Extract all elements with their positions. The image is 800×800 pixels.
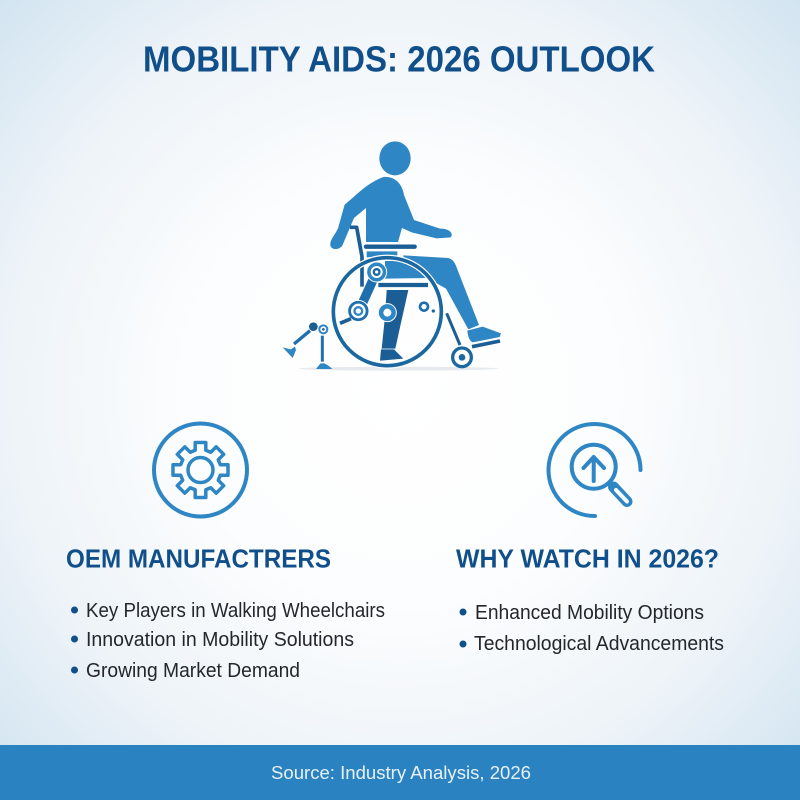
robotic leg <box>283 322 332 369</box>
icon: gear <box>154 424 247 516</box>
wheelchair big wheel <box>333 258 441 366</box>
seat bar <box>378 278 428 291</box>
footer band: Source: Industry Analysis, 2026 <box>271 762 531 783</box>
title: MOBILITY AIDS: 2026 OUTLOOK <box>143 38 655 80</box>
robotic arm link <box>359 273 376 310</box>
dark lower leg <box>382 290 408 349</box>
list: why watch: Technological Advancements <box>474 633 724 655</box>
caster fork <box>447 313 460 345</box>
robotic lower joint <box>348 300 369 322</box>
illustration: person in wheelchair <box>283 141 501 371</box>
robotic upper joint <box>367 262 387 282</box>
icon: magnifier with up arrow <box>548 424 640 516</box>
list: why watch <box>460 602 724 655</box>
list: OEM manufacturers: Key Players in Walking Wheelchairs <box>86 600 385 622</box>
footer band <box>0 745 800 800</box>
footrest <box>472 341 500 347</box>
person head <box>379 141 411 175</box>
list: OEM manufacturers <box>71 600 385 682</box>
person thigh and lower leg <box>385 255 479 329</box>
person torso and arms <box>330 177 452 249</box>
caster wheel <box>453 348 471 367</box>
armrest <box>366 240 415 253</box>
heading: OEM manufacturers: OEM MANUFACTRERS <box>66 544 331 574</box>
list: OEM manufacturers: Innovation in Mobility Solutions <box>86 629 354 651</box>
small joint <box>420 303 435 313</box>
person foot <box>467 327 501 342</box>
link stub <box>340 319 351 323</box>
chair back frame <box>350 227 362 287</box>
heading: why watch: WHY WATCH IN 2026? <box>456 544 719 574</box>
seat cushion <box>367 251 397 257</box>
middle joint <box>378 304 396 322</box>
shoe <box>380 349 403 361</box>
list: OEM manufacturers: Growing Market Demand <box>86 660 300 682</box>
list: why watch: Enhanced Mobility Options <box>475 602 704 624</box>
ground shadow <box>298 367 498 371</box>
